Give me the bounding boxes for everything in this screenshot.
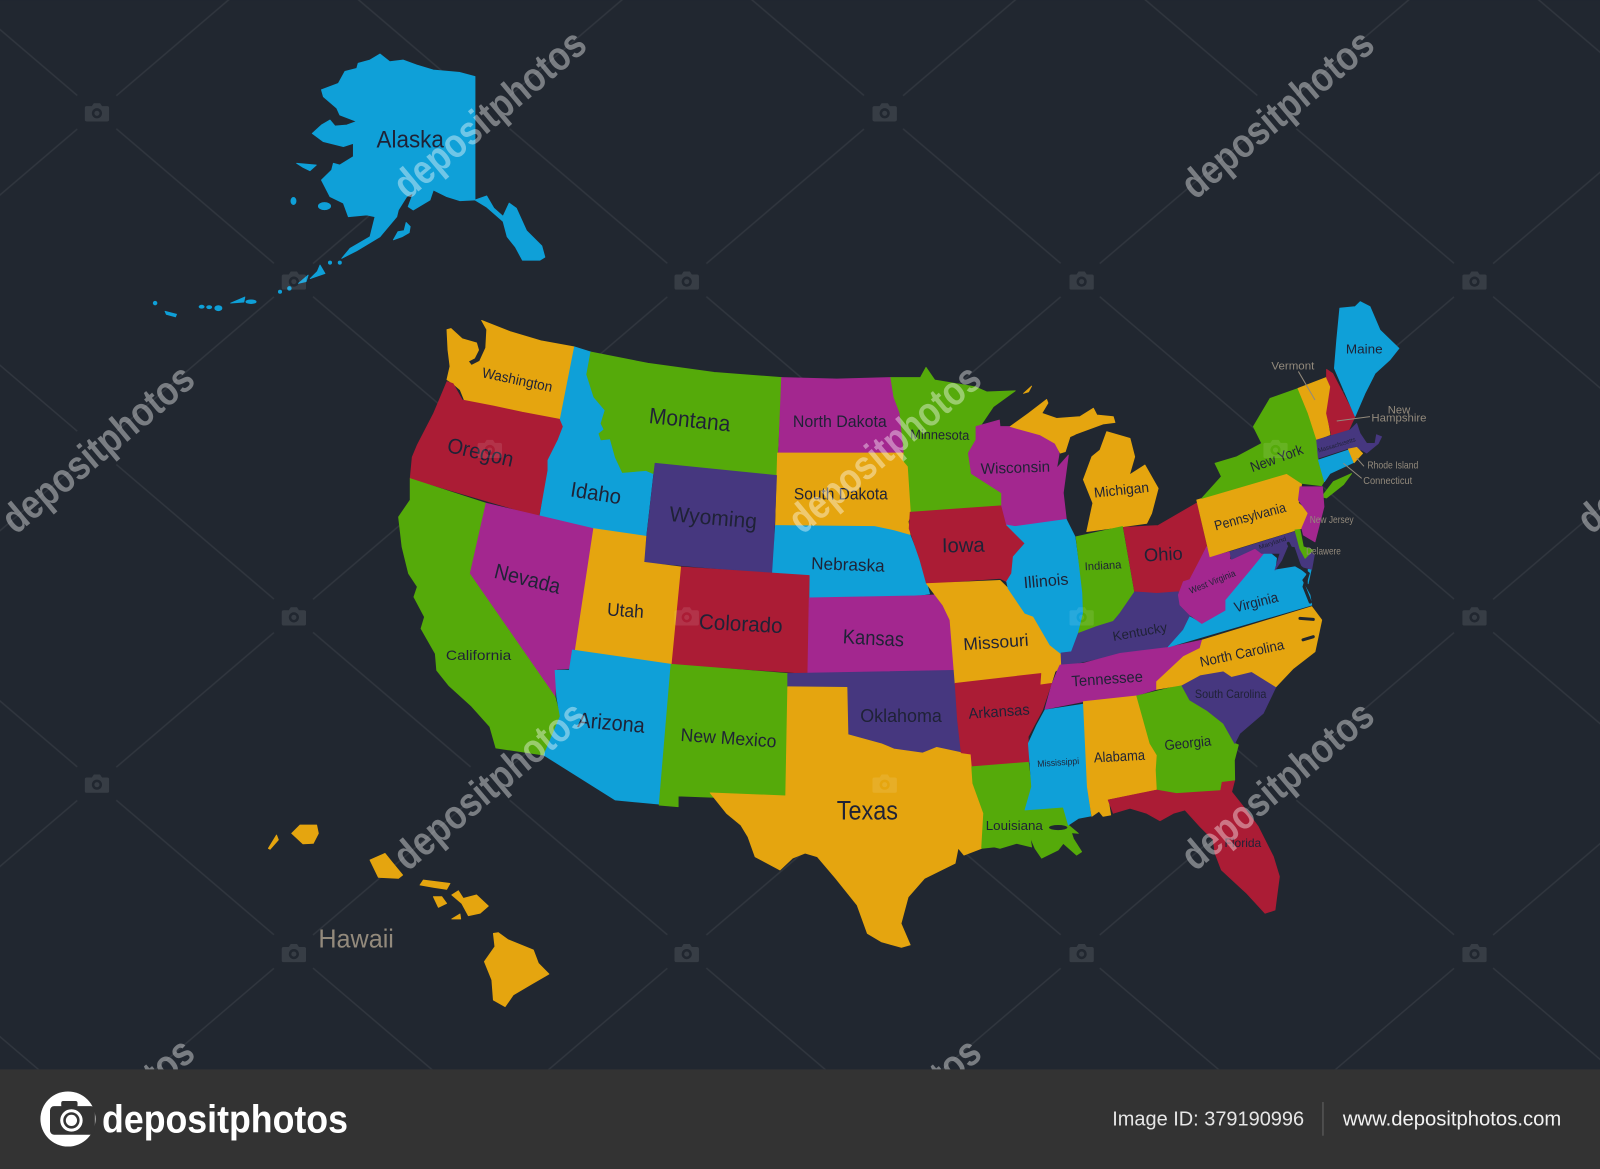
state: Maryland <box>1230 532 1314 570</box>
state: Pennsylvania: Pennsylvania <box>1213 500 1288 533</box>
state: Maine <box>1334 302 1399 416</box>
state: Wisconsin <box>968 420 1068 527</box>
state: Texas <box>710 687 984 947</box>
state: Idaho <box>540 347 653 536</box>
state: Hawaii: Hawaii <box>318 926 394 954</box>
state: Alabama <box>1083 696 1157 816</box>
state: Ohio: Ohio <box>1143 543 1183 566</box>
state: Indiana: Indiana <box>1084 559 1123 573</box>
state: Oregon <box>410 382 563 516</box>
state: Alaska: Alaska <box>377 126 444 153</box>
state: Tennessee <box>1045 640 1202 709</box>
state: Iowa: Iowa <box>942 535 986 557</box>
state: North Dakota: North Dakota <box>793 413 888 431</box>
state: Idaho: Idaho <box>569 477 623 509</box>
state: Nevada: Nevada <box>492 559 563 599</box>
state: South Dakota: South Dakota <box>794 486 889 504</box>
state: New Hampshire <box>1327 369 1427 436</box>
state: North Carolina <box>1157 607 1322 689</box>
state: Indiana <box>1076 527 1135 633</box>
state: Nebraska: Nebraska <box>811 553 885 576</box>
state: Montana: Montana <box>648 403 732 437</box>
state: Texas: Texas <box>837 796 898 826</box>
state: North Carolina: North Carolina <box>1198 637 1286 671</box>
state: Louisiana <box>972 762 1082 858</box>
state: Rhode Island: Rhode Island <box>1367 461 1418 472</box>
state: New York <box>1202 388 1352 498</box>
state: Arkansas: Arkansas <box>968 702 1031 723</box>
state: Wyoming: Wyoming <box>668 502 758 534</box>
state: Massachusetts <box>1317 423 1382 458</box>
state: Oklahoma <box>788 670 961 753</box>
state: Mississippi: Mississippi <box>1037 756 1079 769</box>
state: Vermont: Vermont <box>1271 360 1315 372</box>
state: Arkansas <box>955 673 1051 767</box>
state: Montana <box>587 352 782 476</box>
state: Missouri: Missouri <box>963 630 1029 654</box>
state: Mississippi <box>1025 704 1091 825</box>
state: Kentucky: Kentucky <box>1111 619 1169 644</box>
state: Washington <box>447 320 574 419</box>
footer bar <box>0 1069 1600 1169</box>
state: Maine: Maine <box>1346 342 1383 357</box>
website: www.depositphotos.com <box>1342 1109 1561 1131</box>
state: Missouri <box>927 580 1062 685</box>
watermark: depositphotos repeated: depositphotos <box>779 355 990 542</box>
state: Alaska <box>153 54 545 317</box>
state: California: California <box>446 648 511 664</box>
state: Wyoming <box>644 463 777 573</box>
map: contiguous United States <box>399 302 1427 947</box>
state: Delaware <box>1295 529 1341 558</box>
state: Illinois <box>1007 519 1083 653</box>
state: Ohio <box>1123 503 1207 595</box>
state: Utah <box>574 529 681 664</box>
state: Pennsylvania <box>1197 473 1308 557</box>
state: Washington: Washington <box>481 365 554 396</box>
state: South Dakota <box>776 453 911 535</box>
state: Florida <box>1108 780 1279 913</box>
state: Kentucky <box>1061 592 1190 667</box>
state: New Mexico <box>659 664 788 807</box>
state: Minnesota <box>891 367 1015 513</box>
state: New Jersey: New Jersey <box>1310 515 1354 526</box>
state: Connecticut <box>1318 450 1413 487</box>
logo wordmark: depositphotos <box>102 1099 348 1142</box>
state: California <box>399 479 560 755</box>
state: Alabama: Alabama <box>1094 748 1145 766</box>
state: Vermont <box>1271 360 1331 440</box>
state: Oklahoma: Oklahoma <box>860 705 943 726</box>
state: Delaware: Delawere <box>1306 546 1341 557</box>
image id: Image ID: 379190996 <box>1112 1109 1304 1131</box>
state: New Jersey <box>1298 487 1354 542</box>
icon: depositphotos camera logo <box>40 1091 96 1147</box>
state: Georgia: Georgia <box>1164 733 1212 754</box>
state: New York: New York <box>1248 442 1306 476</box>
state: Oregon: Oregon <box>445 433 516 472</box>
state: Colorado <box>671 567 809 673</box>
state: Nebraska <box>772 526 930 598</box>
state: New Hampshire: Hampshire <box>1371 412 1427 424</box>
watermark: depositphotos repeated: depositphotos <box>384 691 595 879</box>
state: Wisconsin: Wisconsin <box>980 459 1050 478</box>
state: North Dakota <box>779 378 904 453</box>
watermark: depositphotos repeated: depositphotos <box>1172 691 1383 879</box>
state: Michigan: Michigan <box>1093 480 1150 502</box>
state: New Hampshire: New <box>1388 404 1411 416</box>
state: New Mexico: New Mexico <box>680 724 777 752</box>
state: Tennessee: Tennessee <box>1071 669 1143 690</box>
state: South Carolina: South Carolina <box>1195 687 1266 701</box>
state: Nevada <box>469 503 593 697</box>
state: Hawaii <box>268 825 549 1007</box>
state: Utah: Utah <box>606 598 645 622</box>
state: Arizona <box>544 650 671 804</box>
state: Iowa <box>909 506 1025 584</box>
state: Connecticut: Connecticut <box>1363 476 1413 487</box>
state: West Virginia <box>1178 547 1266 623</box>
state: Michigan <box>1010 386 1158 532</box>
state: Virginia <box>1168 550 1312 647</box>
state: Massachusetts: Massachusetts <box>1317 436 1356 454</box>
state: Kansas <box>808 595 955 673</box>
state: South Carolina <box>1182 671 1276 743</box>
state: Louisiana: Louisiana <box>986 818 1043 833</box>
state: Colorado: Colorado <box>698 610 783 638</box>
state: Florida: Florida <box>1224 836 1261 850</box>
state: Arizona: Arizona <box>577 708 646 738</box>
watermark: camera icons <box>85 103 1487 962</box>
state: Virginia: Virginia <box>1233 590 1280 616</box>
state: Rhode Island <box>1348 447 1418 472</box>
state: Illinois: Illinois <box>1023 570 1069 592</box>
state: Minnesota: Minnesota <box>910 427 970 443</box>
state: Georgia <box>1137 685 1238 793</box>
state: Kansas: Kansas <box>842 626 905 651</box>
state: Maryland: Maryland <box>1258 536 1287 551</box>
state: West Virginia: West Virginia <box>1188 568 1238 596</box>
